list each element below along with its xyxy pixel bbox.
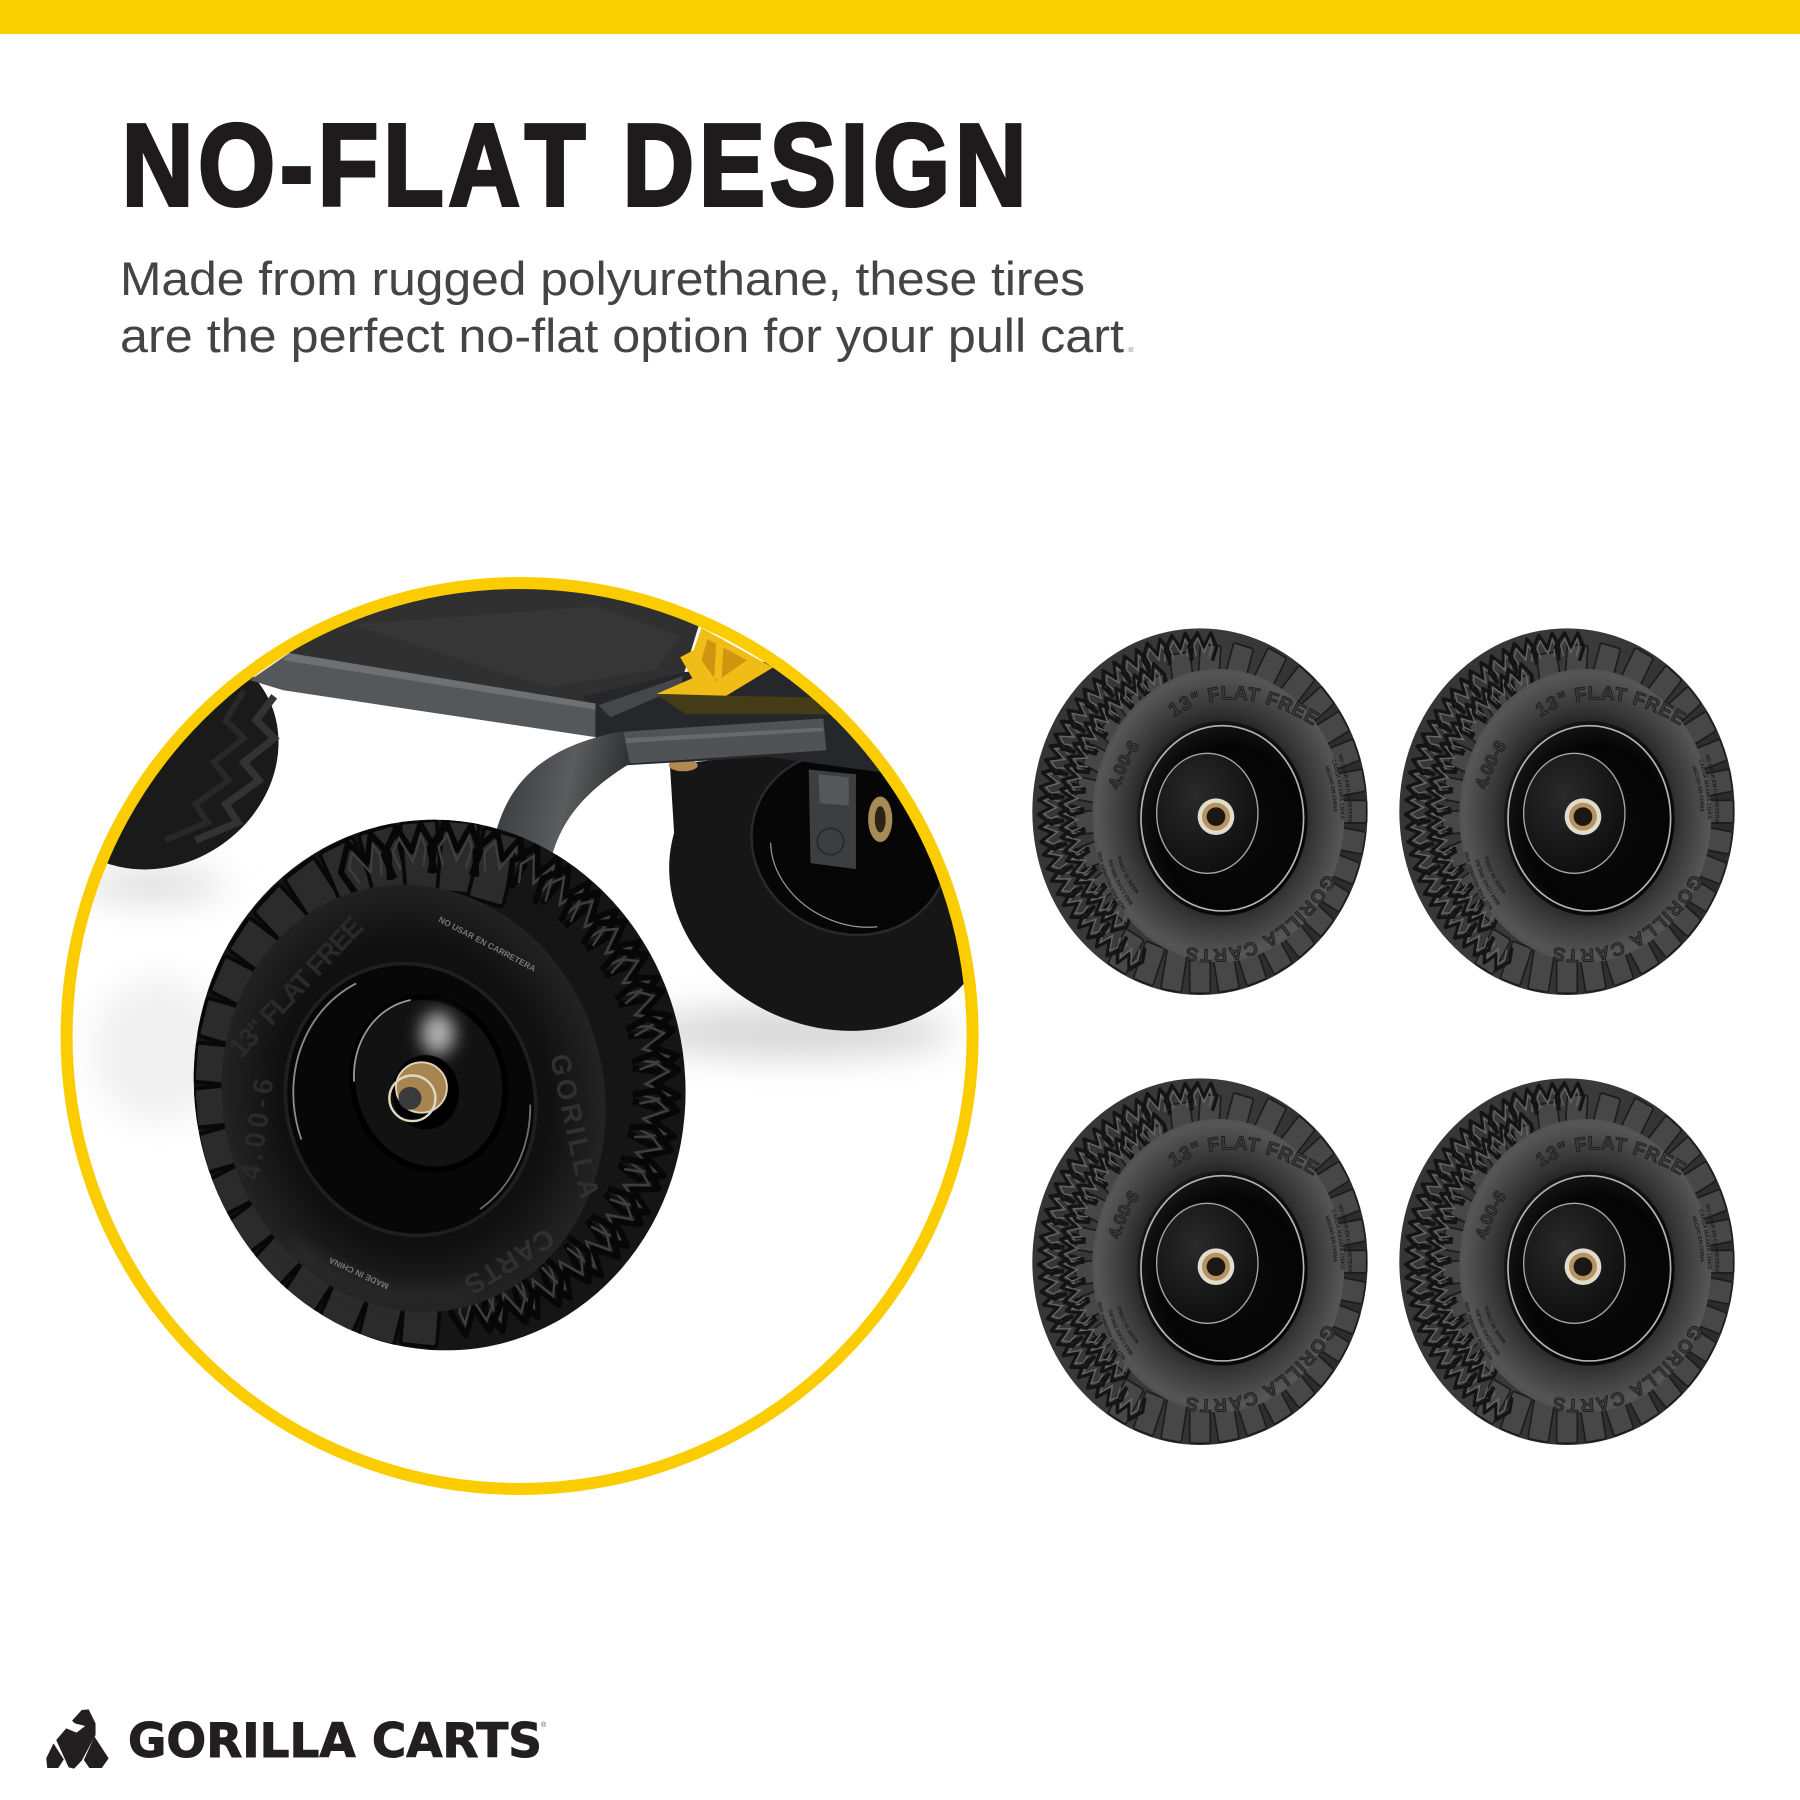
tire sidewall text: MAX LOAD 300LBS <box>1108 1310 1133 1355</box>
tire sidewall text: MAX LOAD 300LBS <box>1108 860 1133 905</box>
axle hub and pin <box>389 1062 447 1121</box>
tire sidewall text: NO USAR EN CARRETERA <box>1706 1204 1720 1272</box>
tire sidewall text: MADE IN CHINA <box>1118 856 1139 894</box>
tire sidewall text <box>1098 686 1352 962</box>
tire sidewall text: 4.00-6 <box>1109 1190 1138 1240</box>
tire sidewall text: CARGA MAXIMA 130KG <box>1332 760 1344 820</box>
tire sidewall text <box>1464 686 1720 962</box>
tire sidewall text: 4.00-6 <box>1476 740 1506 790</box>
tire sidewall text: NO USAR EN CARRETERA <box>1706 754 1720 822</box>
sidewall text on main wheel: CARTS <box>459 1222 560 1301</box>
subtitle text: are the perfect no-flat option for your pull cart . <box>120 309 1138 362</box>
tire sidewall text: MADE IN CHINA <box>1484 856 1506 894</box>
logo wordmark: GORILLA CARTS <box>128 1714 542 1769</box>
subtitle text: Made from rugged polyurethane, these tires <box>120 252 1085 305</box>
panel: circular close-up photo of cart wheel <box>60 577 979 1495</box>
sidewall text on main wheel: GORILLA <box>544 1051 605 1201</box>
tire sidewall text: MAX LOAD 300LBS <box>1476 1310 1500 1355</box>
icon: gorilla <box>46 1709 109 1769</box>
sidewall text on main wheel: 13" FLAT FREE <box>223 911 369 1063</box>
sidewall text on main wheel <box>223 911 605 1301</box>
tire sidewall text: MAX LOAD 300LBS <box>1476 860 1500 905</box>
tire: bottom left <box>1032 1078 1368 1445</box>
tire sidewall text: NOT FOR HIGHWAY USE <box>1098 851 1126 910</box>
tire sidewall text: GORILLA CARTS <box>1553 1326 1702 1412</box>
main wheel <box>194 820 686 1350</box>
tire sidewall text: 13" FLAT FREE <box>1536 686 1686 726</box>
sidewall text on main wheel: MADE IN CHINA <box>327 1255 390 1292</box>
cart frame <box>250 558 917 864</box>
yellow ring <box>67 583 973 1489</box>
tire sidewall text: NOT FOR HIGHWAY USE <box>1464 1301 1493 1360</box>
tire: bottom right <box>1399 1078 1735 1445</box>
sidewall text on main wheel: 4.00-6 <box>234 1077 279 1182</box>
yellow hitch bracket <box>657 628 773 696</box>
tire sidewall text: CARGA MAXIMA 130KG <box>1699 760 1712 820</box>
tire sidewall text: 4.00-6 <box>1476 1190 1506 1240</box>
tire sidewall text: 13" FLAT FREE <box>1536 1136 1686 1176</box>
back left tire <box>107 676 280 870</box>
tire sidewall text: NO USAR EN CARRETERA <box>1338 1204 1352 1272</box>
tire sidewall text: HECHO EN CHINA <box>1325 766 1338 812</box>
image crop below wheel <box>432 1350 458 1351</box>
tire sidewall text: CARGA MAXIMA 130KG <box>1699 1210 1712 1270</box>
tire sidewall text: GORILLA CARTS <box>1553 876 1702 962</box>
tire sidewall text <box>1464 1136 1720 1412</box>
tire sidewall text: 13" FLAT FREE <box>1168 686 1320 726</box>
tire: top right <box>1399 628 1735 995</box>
tire sidewall text: GORILLA CARTS <box>1186 876 1334 962</box>
tire: top left <box>1032 628 1368 995</box>
tire sidewall text: CARGA MAXIMA 130KG <box>1332 1210 1344 1270</box>
subtitle text <box>120 252 1138 362</box>
tire sidewall text: NO USAR EN CARRETERA <box>1338 754 1352 822</box>
title: NO-FLAT DESIGN <box>122 100 1031 230</box>
tire sidewall text: NOT FOR HIGHWAY USE <box>1098 1301 1126 1360</box>
tire sidewall text: HECHO EN CHINA <box>1325 1216 1338 1262</box>
tire sidewall text: MADE IN CHINA <box>1118 1306 1139 1344</box>
tire sidewall text: HECHO EN CHINA <box>1692 1216 1704 1262</box>
ground shadows <box>80 872 953 1122</box>
top yellow bar <box>0 0 1800 34</box>
tire sidewall text: 4.00-6 <box>1109 740 1138 790</box>
back right wheel <box>668 756 964 1031</box>
sidewall text on main wheel: NO USAR EN CARRETERA <box>437 914 538 974</box>
tire sidewall text <box>1098 1136 1352 1412</box>
logo: Gorilla Carts <box>46 1709 547 1769</box>
tire sidewall text: HECHO EN CHINA <box>1692 766 1704 812</box>
tire sidewall text: 13" FLAT FREE <box>1168 1136 1320 1176</box>
registered mark: ® <box>541 1721 547 1729</box>
tire sidewall text: GORILLA CARTS <box>1186 1326 1334 1412</box>
tire sidewall text: NOT FOR HIGHWAY USE <box>1464 851 1493 910</box>
tire sidewall text: MADE IN CHINA <box>1484 1306 1506 1344</box>
